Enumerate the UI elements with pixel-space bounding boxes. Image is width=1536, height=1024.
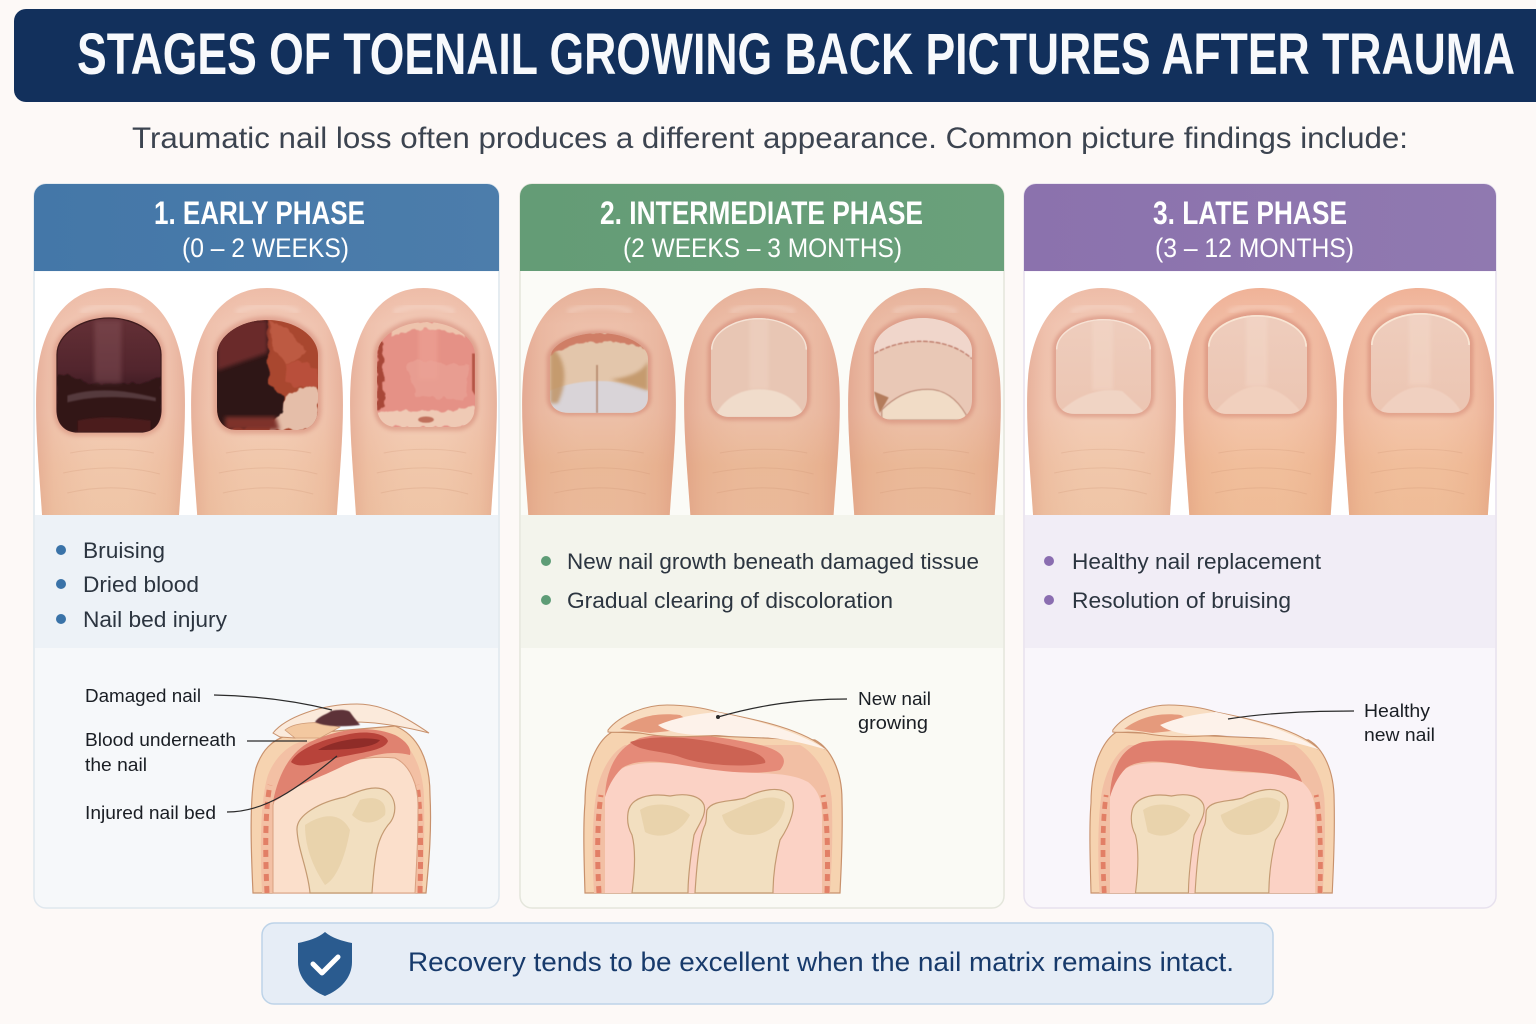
header: early phase [34, 184, 499, 271]
header: late phase [1024, 184, 1496, 271]
callout: injured nail bed [85, 756, 337, 823]
nail: raw nail bed [377, 322, 475, 427]
nail: almost healed [1056, 319, 1151, 414]
header: late phase: (3 – 12 MONTHS) [1155, 233, 1354, 263]
findings: early phase [35, 515, 498, 648]
title banner [14, 9, 1536, 102]
bones [628, 789, 793, 893]
header: early phase: 1. EARLY PHASE [154, 195, 365, 231]
subtitle: Traumatic nail loss often produces a different appearance. Common picture findings include: [132, 122, 1408, 155]
findings: early phase: Nail bed injury [83, 607, 228, 632]
nail: fully healed [1371, 313, 1470, 413]
nail: peeling, discoloured [550, 333, 648, 413]
callout: new nail growing: New nail [858, 688, 931, 709]
callout: blood underneath the nail: Blood underneath [85, 729, 236, 750]
header: late phase: 3. LATE PHASE [1153, 195, 1347, 231]
header: intermediate phase [520, 184, 1004, 271]
photo strip: early phase toes [35, 272, 498, 515]
header: intermediate phase: (2 WEEKS – 3 MONTHS) [623, 233, 902, 263]
header: intermediate phase: 2. INTERMEDIATE PHASE [600, 195, 923, 231]
nail: ridged, regrowing [874, 318, 972, 420]
callout: damaged nail [85, 685, 332, 710]
callout: healthy new nail [1228, 700, 1435, 745]
callout: damaged nail: Damaged nail [85, 685, 201, 706]
callout: new nail growing [716, 688, 931, 733]
findings: late phase: Healthy nail replacement [1072, 549, 1322, 574]
panel: late phase [1024, 184, 1496, 908]
callout: blood underneath the nail: the nail [85, 754, 147, 775]
photo strip: intermediate phase toes [521, 272, 1003, 515]
findings: late phase: Resolution of bruising [1072, 588, 1291, 613]
findings: early phase: Bruising [83, 538, 165, 563]
callout: healthy new nail: Healthy [1364, 700, 1431, 721]
photo strip: late phase toes [1025, 272, 1495, 515]
diagram: injured toe cross-section [251, 704, 431, 893]
callout: blood underneath the nail [85, 729, 307, 775]
nail: dark bruised [57, 318, 161, 432]
nail: partly bruised, raw right side [213, 320, 318, 430]
diagram: regrowing toe cross-section [584, 705, 842, 893]
icon: shield with check [298, 932, 352, 996]
callout: new nail growing: growing [858, 712, 928, 733]
recovery callout [262, 923, 1273, 1004]
callout: healthy new nail: new nail [1364, 724, 1435, 745]
diagram: healed toe cross-section [1090, 705, 1334, 893]
findings: intermediate phase: Gradual clearing of discoloration [567, 588, 893, 613]
nail: clean new growth [711, 318, 807, 417]
panel: intermediate phase [520, 184, 1004, 908]
findings: intermediate phase: New nail growth beneath damaged tissue [567, 549, 979, 574]
header: early phase: (0 – 2 WEEKS) [182, 233, 349, 263]
panel: early phase [34, 184, 499, 908]
nail: healthy replacement [1208, 315, 1307, 414]
recovery message: Recovery tends to be excellent when the nail matrix remains intact. [408, 947, 1234, 977]
findings: intermediate phase [521, 515, 1003, 648]
findings: early phase: Dried blood [83, 572, 199, 597]
bones [1131, 789, 1288, 893]
callout: injured nail bed: Injured nail bed [85, 802, 216, 823]
findings: late phase [1025, 515, 1495, 648]
